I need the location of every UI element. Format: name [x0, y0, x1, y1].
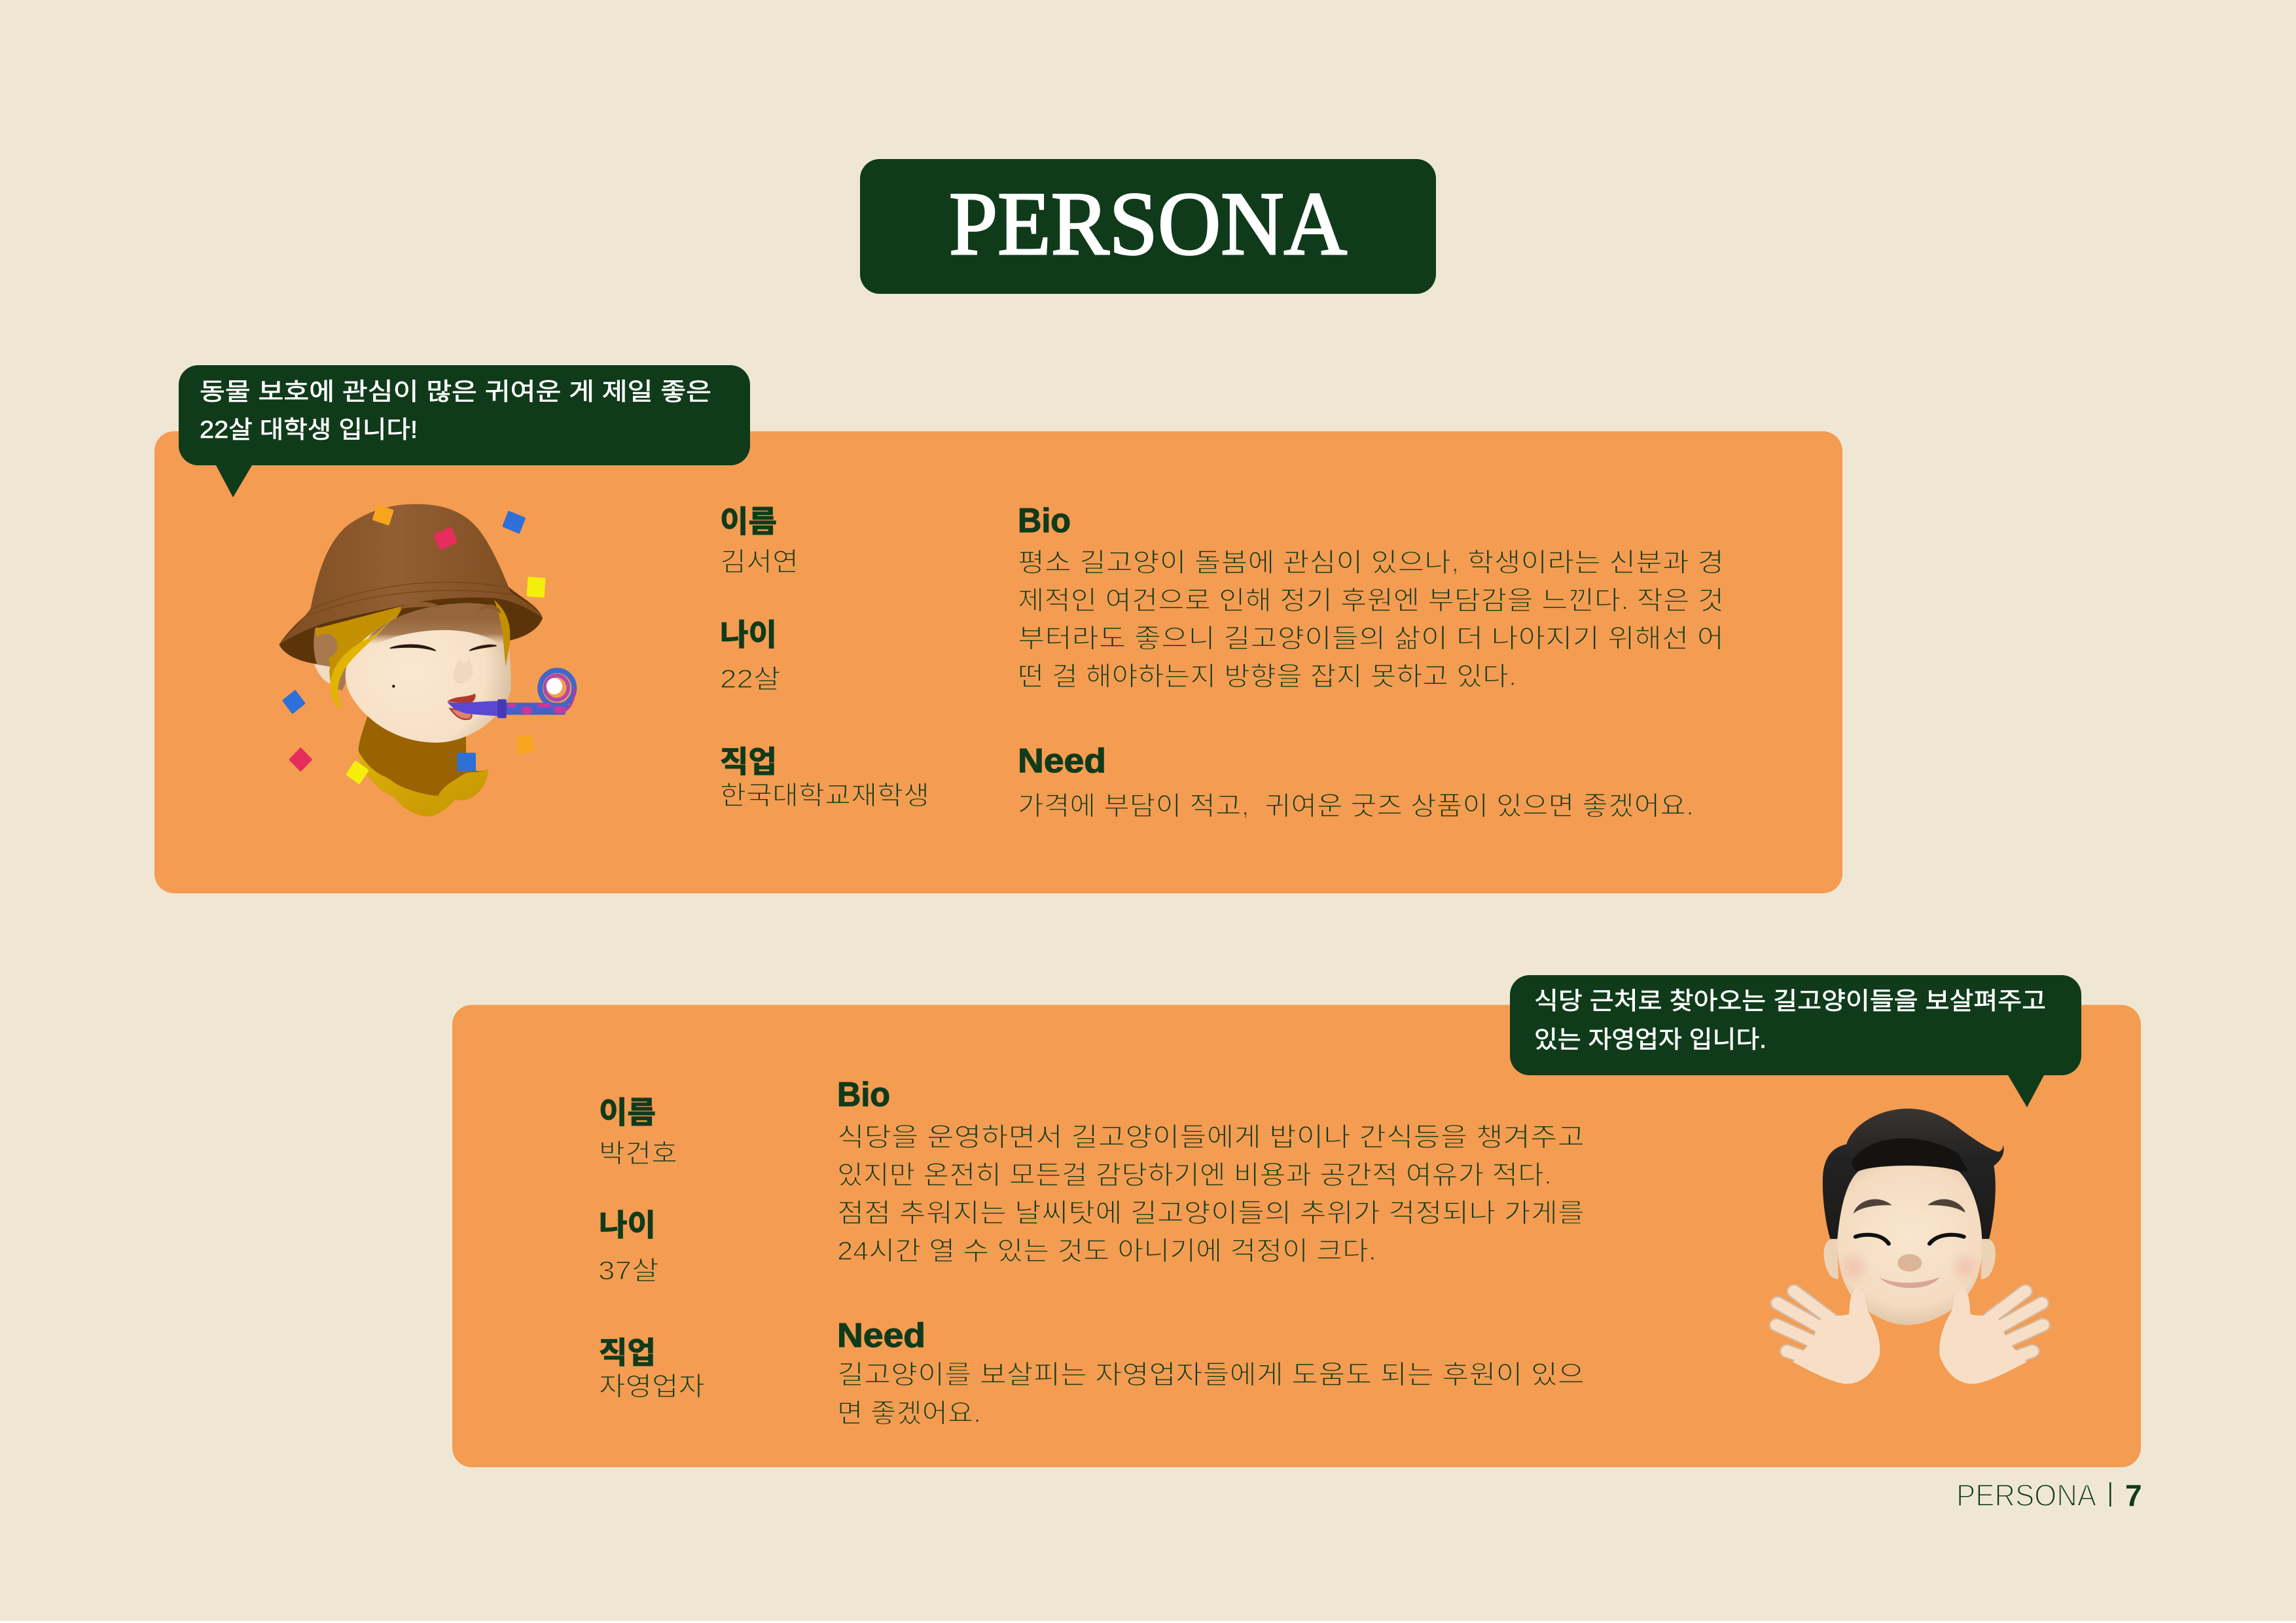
text block: age: [598, 1208, 659, 1285]
text block: name: 이름: [599, 1096, 656, 1130]
text block: job: 직업: [720, 745, 777, 779]
text block: need: 면 좋겠어요.: [837, 1399, 981, 1428]
title: PERSONA: [949, 173, 1347, 274]
text block: bio: 떤 걸 해야하는지 방향을 잡지 못하고 있다.: [1018, 662, 1516, 691]
text block: age: 37살: [598, 1257, 659, 1285]
footer: section name and page number: 7: [2125, 1478, 2142, 1512]
text block: bio: 점점 추워지는 날씨탓에 길고양이들의 추위가 걱정되나 가게를: [837, 1199, 1585, 1228]
speech bubble: persona 2: 있는 자영업자 입니다.: [1534, 1026, 1767, 1053]
speech bubble: persona 1: 22살 대학생 입니다!: [200, 416, 418, 443]
text block: bio: 평소 길고양이 돌봄에 관심이 있으나, 학생이라는 신분과 경: [1018, 548, 1724, 577]
text block: bio: 부터라도 좋으니 길고양이들의 삶이 더 나아지기 위해선 어: [1018, 624, 1724, 653]
title: [860, 159, 1436, 294]
icon: left hand: [1776, 1287, 1880, 1384]
text block: name: 이름: [720, 505, 777, 539]
text block: job: 자영업자: [599, 1372, 705, 1401]
text block: name: [599, 1096, 677, 1168]
text block: name: 김서연: [720, 548, 798, 577]
text block: bio: 제적인 여건으로 인해 정기 후원엔 부담감을 느낀다. 작은 것: [1018, 586, 1724, 615]
text block: bio: 식당을 운영하면서 길고양이들에게 밥이나 간식등을 챙겨주고: [837, 1123, 1585, 1152]
icon: woman avatar with party blower: [279, 504, 575, 817]
footer: section name and page number: PERSONA: [1956, 1478, 2097, 1512]
text block: name: [720, 505, 798, 577]
text block: need: Need: [837, 1317, 925, 1355]
speech bubble: persona 1: [179, 365, 750, 497]
panel: persona 1: [154, 365, 1842, 893]
icon: man avatar with open hands: [1776, 1109, 2043, 1384]
text block: bio: [1018, 502, 1724, 691]
text block: name: 박건호: [599, 1139, 677, 1168]
text block: need: Need: [1018, 742, 1106, 780]
text block: bio: Bio: [837, 1076, 890, 1114]
speech bubble: persona 2: [1510, 975, 2081, 1107]
text block: age: 나이: [599, 1208, 656, 1242]
text block: job: [720, 745, 929, 810]
text block: bio: 있지만 온전히 모든걸 감당하기엔 비용과 공간적 여유가 적다.: [837, 1161, 1552, 1190]
text block: job: 직업: [599, 1336, 656, 1370]
speech bubble: persona 1: 동물 보호에 관심이 많은 귀여운 게 제일 좋은: [200, 378, 711, 405]
text block: need: [837, 1317, 1585, 1428]
panel: persona 2: [452, 975, 2141, 1467]
speech bubble: persona 2: 식당 근처로 찾아오는 길고양이들을 보살펴주고: [1534, 988, 2046, 1014]
text block: job: [599, 1336, 705, 1401]
text block: need: 길고양이를 보살피는 자영업자들에게 도움도 되는 후원이 있으: [837, 1361, 1585, 1389]
text block: need: 가격에 부담이 적고, 귀여운 굿즈 상품이 있으면 좋겠어요.: [1018, 792, 1694, 821]
text block: bio: [837, 1076, 1585, 1266]
text block: age: [720, 618, 781, 694]
text block: need: [1018, 742, 1694, 821]
text block: bio: 24시간 열 수 있는 것도 아니기에 걱정이 크다.: [837, 1237, 1376, 1266]
text block: job: 한국대학교재학생: [720, 781, 929, 810]
text block: age: 나이: [720, 618, 777, 652]
text block: age: 22살: [720, 665, 781, 694]
icon: right hand: [1939, 1287, 2043, 1384]
text block: bio: Bio: [1018, 502, 1071, 540]
